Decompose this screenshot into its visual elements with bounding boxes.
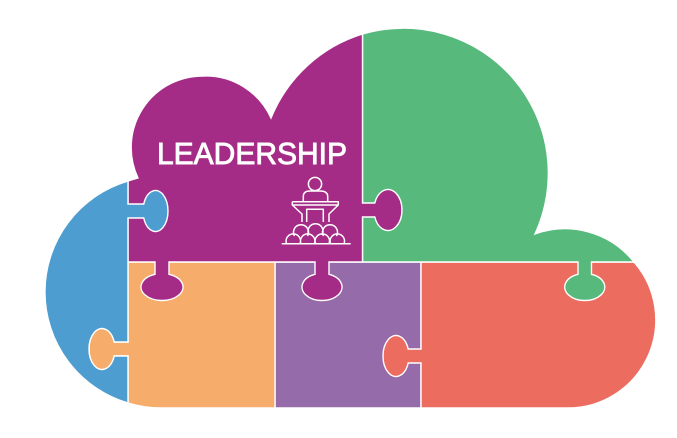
piece: red with tab	[383, 262, 656, 408]
piece: orange with tab	[89, 262, 275, 408]
piece: magenta with tabs	[128, 34, 402, 300]
icon: speaker at lectern with audience	[282, 177, 351, 244]
piece: blue with tab	[45, 181, 168, 403]
heading: LEADERSHIP: LEADERSHIP	[157, 136, 347, 171]
puzzle cloud pieces	[45, 28, 656, 408]
piece: green with tab	[362, 28, 634, 301]
piece: purple	[275, 262, 421, 408]
